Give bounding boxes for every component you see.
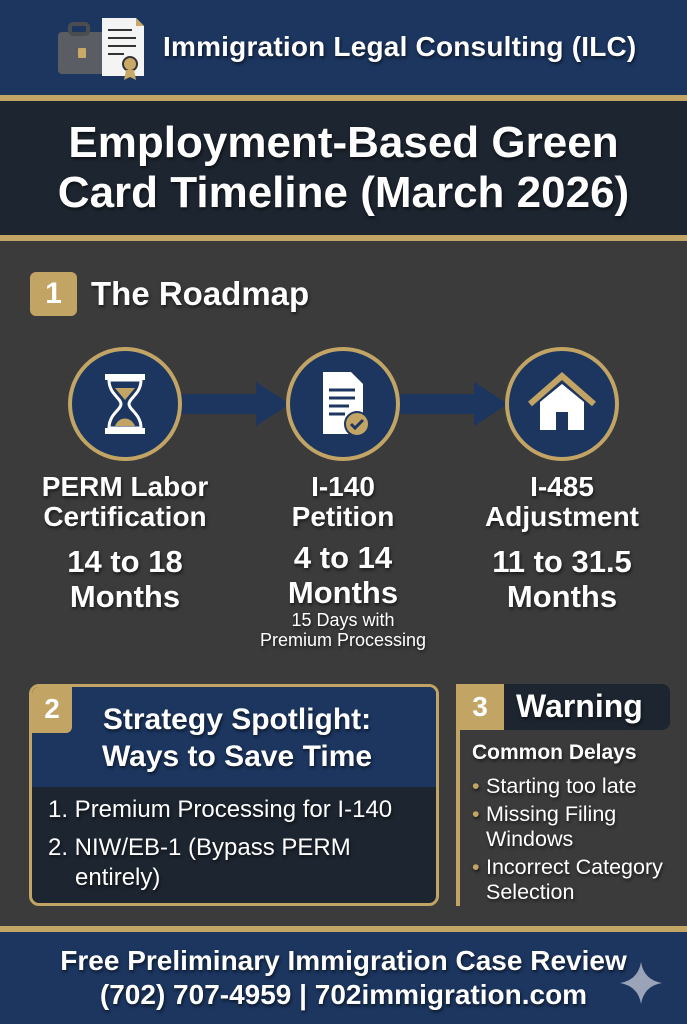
step: I-140: Petition — [292, 501, 394, 532]
panel heading: Strategy Spotlight: — [103, 703, 371, 736]
step: PERM: 14 to 18 — [67, 544, 183, 579]
panel heading — [102, 703, 374, 776]
step: I-140: Months — [288, 575, 398, 610]
delay list: Starting too late — [486, 774, 637, 798]
footer: Free Preliminary Immigration Case Review — [60, 945, 627, 976]
step: I-140: Premium Processing — [260, 630, 426, 650]
step: I-485: Months — [507, 579, 617, 614]
arrow 1 — [181, 382, 286, 426]
badge 3 — [456, 684, 504, 730]
badge 2 — [32, 687, 72, 733]
company name: Immigration Legal Consulting (ILC) — [163, 31, 636, 62]
warning heading: Warning — [516, 688, 643, 724]
panel heading: Ways to Save Time — [102, 740, 372, 773]
delay list: Missing Filing Windows — [486, 802, 616, 851]
icon: house — [505, 347, 619, 461]
badge 2: 2 — [44, 693, 60, 724]
title band — [0, 101, 687, 235]
step: I-140: 4 to 14 — [294, 540, 392, 575]
delay list: • — [472, 802, 480, 826]
header band — [0, 0, 687, 95]
step: I-485: I-485 — [530, 471, 594, 502]
icon: briefcase and certificate — [58, 18, 144, 80]
panel: warning — [456, 684, 670, 906]
section 1 heading — [30, 272, 310, 316]
step: PERM: PERM Labor — [42, 471, 208, 502]
heading text: The Roadmap — [91, 275, 309, 312]
badge 3: 3 — [472, 691, 488, 722]
badge 1 — [30, 272, 77, 316]
delay list — [472, 774, 664, 904]
list — [48, 796, 393, 892]
delay list: • — [472, 774, 480, 798]
step: I-140: I-140 — [311, 471, 375, 502]
step: I-140 — [260, 347, 427, 652]
footer — [0, 932, 687, 1024]
icon: sparkle — [620, 962, 662, 1004]
step: I-140: 15 Days with — [291, 610, 395, 630]
subheading: Common Delays — [472, 741, 637, 764]
arrow 2 — [399, 382, 505, 426]
icon: document with check — [286, 347, 400, 461]
list: 1. Premium Processing for I-140 — [48, 796, 392, 823]
title band: Card Timeline (March 2026) — [58, 168, 629, 217]
footer: (702) 707-4959 | 702immigration.com — [100, 979, 587, 1010]
step: PERM: Certification — [43, 501, 207, 532]
badge 1: 1 — [45, 277, 62, 310]
step: I-485: Adjustment — [485, 501, 639, 532]
step: I-485: 11 to 31.5 — [492, 544, 632, 579]
step: PERM — [42, 347, 210, 614]
step: I-485 — [485, 347, 640, 614]
panel: strategy spotlight — [29, 684, 439, 906]
delay list: • — [472, 855, 480, 879]
delay list: Incorrect Category Selection — [486, 855, 663, 904]
icon: hourglass — [68, 347, 182, 461]
step: PERM: Months — [70, 579, 180, 614]
title band: Employment-Based Green — [68, 118, 619, 167]
list: 2. NIW/EB-1 (Bypass PERM entirely) — [48, 834, 351, 891]
